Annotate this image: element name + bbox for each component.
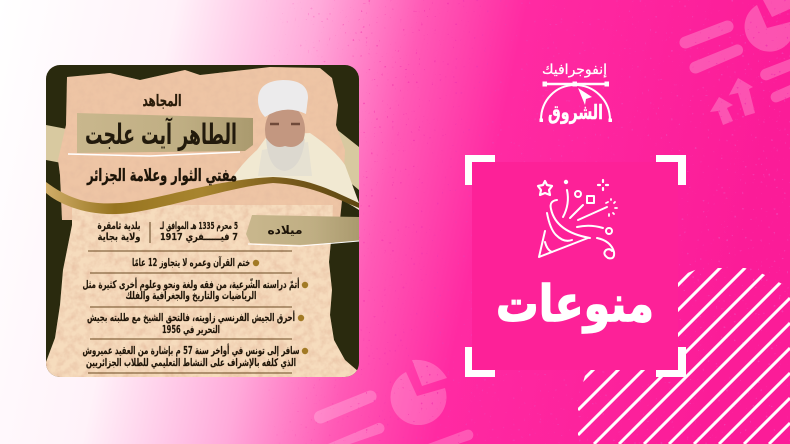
birth place: بلدية ثامقرة: [98, 221, 140, 232]
logo bezier bar and arc: [540, 82, 612, 122]
card dark background: [46, 65, 359, 377]
portrait: [230, 80, 359, 210]
name band: [77, 113, 253, 153]
fact 3: التحرير في 1956: [162, 324, 220, 336]
logo cursor: [578, 88, 592, 105]
fact 2: أتمّ دراسته الشّرعية، من فقه ولغة ونحو وعلوم أخرى كثيرة مثل: [82, 277, 300, 291]
speckle texture: [260, 0, 790, 444]
fact 4: الذي كلفه بالإشراف على النشاط التعليمي للطلاب الجزائريين: [86, 357, 296, 369]
bracket corners: [465, 155, 686, 377]
fact 2: [82, 277, 308, 302]
birth label: ميلاده: [268, 223, 302, 237]
torn parchment bottom: [46, 205, 359, 377]
heading small: المجاهد: [142, 91, 182, 110]
decorative shapes: bottom: [314, 360, 473, 444]
decorative shapes: top right: [679, 0, 790, 125]
fact 3: [87, 310, 304, 336]
logo caption: إنفوجرافيك: [542, 62, 607, 78]
birth date: [159, 221, 238, 243]
name title: الطاهر آيت علجت: [85, 117, 237, 151]
logo wordmark: الشروق: [548, 100, 603, 124]
birth place: ولاية بجاية: [98, 232, 140, 243]
logo: [540, 62, 612, 124]
birth date: 7 فيــــــفري 1917: [160, 232, 238, 243]
birth place: [98, 221, 140, 243]
fact 4: سافر إلى تونس في أواخر سنة 57 م بإشارة من العقيد عميروش: [82, 343, 300, 357]
fact 1: ختم القرآن وعمره لا يتجاوز 12 عامًا: [132, 256, 250, 269]
fact 4: [82, 343, 308, 369]
fact 2: الرياضيات والتاريخ والجغرافية والفلك: [126, 290, 256, 302]
robe: [230, 133, 359, 210]
category title: منوعات: [496, 275, 654, 334]
birth label band: [246, 215, 359, 245]
gold ribbon: [46, 177, 359, 214]
torn parchment top: [58, 67, 345, 220]
fact 3: أحرق الجيش الفرنسي زاويته، فالتحق الشيخ مع طلبته بجيش: [87, 310, 295, 324]
face: [265, 110, 305, 147]
birth date: 5 محرم 1335 هـ الموافق لـ: [159, 221, 238, 232]
panel: biography card: [46, 65, 359, 377]
diagonal stripes: [578, 266, 790, 444]
turban: [258, 80, 308, 117]
category panel: [472, 162, 678, 370]
beard: [266, 138, 305, 171]
cream band behind portrait: [46, 125, 359, 190]
icon: party popper: [538, 180, 617, 258]
subtitle: مفتي الثوار وعلامة الجزائر: [86, 166, 237, 186]
fact 1: [132, 256, 259, 269]
